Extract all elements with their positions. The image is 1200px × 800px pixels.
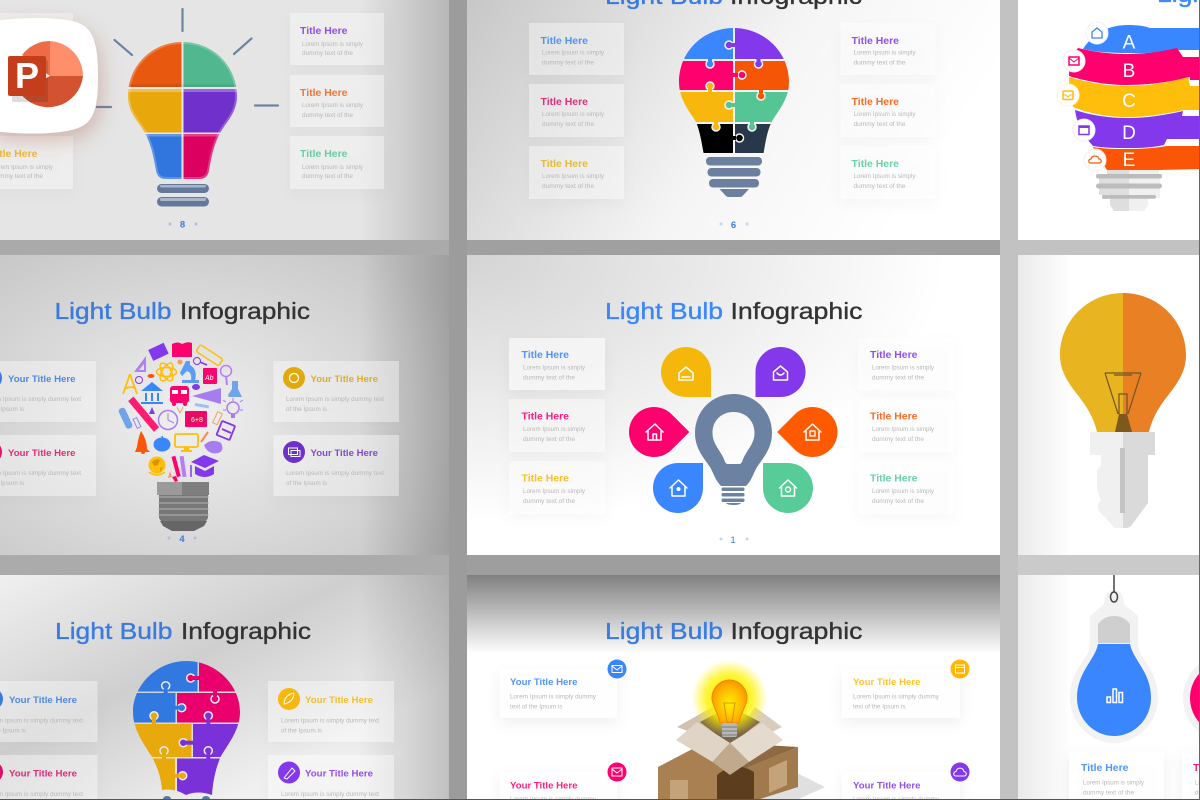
jigsaw bulb base	[706, 157, 762, 197]
card: green title: Lorem Ipsum is simply	[872, 488, 935, 495]
icon: yellow calendar	[950, 660, 970, 678]
title	[605, 298, 862, 324]
card: pink title fragment	[1182, 752, 1200, 800]
title: Infographic	[180, 298, 310, 324]
card: purple title	[290, 13, 384, 65]
second bulb fragment	[1183, 654, 1200, 742]
hanger	[1110, 575, 1118, 602]
slide 8: segmented bulb	[0, 0, 449, 240]
slide: orange and yellow key bulb	[1018, 255, 1200, 555]
icon: bar chart	[1107, 689, 1122, 702]
card: blue title	[529, 23, 624, 75]
slide: hanging bulbs	[1018, 575, 1200, 800]
card: purple title	[840, 23, 936, 75]
card: yellow title	[842, 669, 960, 718]
title: Infographic	[730, 618, 862, 644]
card: pink title: Lorem Ipsum is simply	[523, 426, 586, 433]
card: pink title	[0, 755, 98, 800]
card: purple title: Title Here	[852, 35, 899, 47]
card: green title: Title Here	[870, 472, 918, 484]
card: yellow title: dummy text of the	[542, 183, 594, 190]
icon cluster: 6+8	[191, 417, 203, 424]
card: orange title	[858, 399, 954, 452]
metal bulb socket	[157, 482, 209, 531]
card: purple title: Lorem Ipsum is simply	[872, 364, 935, 372]
card: orange title: Title Here	[870, 410, 918, 422]
bulb glow	[692, 660, 768, 736]
PowerPoint logo: P	[15, 55, 39, 96]
page number	[720, 220, 748, 231]
card: yellow title	[509, 461, 605, 514]
icon: pink mail	[608, 762, 626, 782]
card: orange title: Lorem Ipsum is simply	[302, 102, 364, 109]
title: Light Bulb	[55, 618, 172, 644]
icon: purple cloud	[950, 762, 970, 782]
card: green title: Lorem Ipsum is simply	[854, 173, 916, 180]
page number	[168, 534, 196, 545]
page number	[720, 535, 748, 546]
slide 5: bulb in open box	[467, 575, 1000, 800]
card: orange title: Title Here	[852, 96, 899, 108]
page number: 1	[730, 535, 736, 546]
card: purple title: dummy text of the	[854, 60, 906, 66]
card: blue title: Lorem Ipsum is simply dummy	[510, 694, 597, 700]
card: blue title: Lorem Ipsum is simply	[1083, 780, 1145, 786]
card: yellow title: text of the Ipsum is	[853, 704, 906, 710]
blue bulb	[1077, 644, 1151, 736]
card: purple title: Title Here	[870, 349, 918, 361]
title: Light Bulb	[605, 618, 723, 644]
card: blue title	[500, 669, 617, 718]
card: orange title	[840, 84, 936, 137]
card: green title: Title Here	[852, 158, 899, 170]
page number	[168, 220, 198, 230]
card: yellow title: of the Ipsum is	[286, 406, 327, 413]
card: purple title	[268, 755, 394, 800]
card: orange title: dummy text of the	[302, 112, 353, 119]
bulb base	[1096, 170, 1162, 211]
card: purple title	[858, 338, 954, 390]
card: orange title: dummy text of the	[854, 121, 906, 128]
card: purple title: Lorem Ipsum is simply dummy text	[286, 470, 384, 477]
card: orange title	[290, 75, 384, 127]
band D	[1075, 110, 1200, 148]
card: yellow title	[274, 361, 399, 422]
card: yellow title: of the Ipsum is	[281, 728, 322, 734]
band icons	[1057, 22, 1108, 171]
card: pink title	[0, 435, 96, 496]
title: Infographic	[730, 298, 862, 324]
card: yellow title: Lorem Ipsum is simply	[542, 173, 605, 180]
card: blue title: Your Title Here	[510, 677, 578, 688]
card: pink title	[529, 84, 624, 137]
card: purple title: dummy text of the	[302, 50, 353, 57]
card: pink title	[500, 772, 617, 800]
card: blue title: Title Here	[1081, 762, 1129, 774]
petal: orange	[777, 397, 848, 467]
card: purple title: Title Here	[300, 25, 348, 37]
title	[605, 0, 862, 9]
card: yellow title: Title Here	[522, 472, 569, 484]
band E	[1093, 146, 1200, 170]
slide 1: hero bulb with petals	[467, 255, 1000, 555]
bulb glass right half	[1123, 293, 1186, 432]
card: purple title: Your Title Here	[310, 448, 378, 459]
card: yellow title: Your Title Here	[853, 677, 920, 688]
band A	[1083, 25, 1200, 53]
band letters: D	[1122, 123, 1136, 144]
card: blue title: Lorem Ipsum is simply	[523, 364, 586, 372]
card: orange title: Title Here	[300, 87, 348, 99]
central bulb	[695, 394, 772, 505]
bulb glass left half	[1060, 293, 1123, 432]
jigsaw bulb glass	[679, 28, 789, 153]
card: green title: dummy text of the	[302, 173, 353, 180]
filament	[1105, 373, 1141, 432]
slide 6: jigsaw bulb	[467, 0, 1000, 240]
band C	[1069, 77, 1200, 117]
card: blue title: dummy text of the	[542, 60, 594, 66]
title	[54, 298, 310, 324]
card: yellow title	[529, 146, 624, 199]
petal: purple	[756, 347, 806, 397]
card: pink title: Title Here	[540, 96, 588, 108]
card: purple title: Your Title Here	[853, 780, 920, 792]
card: orange title: dummy text of the	[872, 436, 924, 443]
icon: blue mail	[608, 660, 626, 678]
card: green title: dummy text of the	[854, 183, 906, 190]
card: blue title: Your Title Here	[9, 695, 77, 706]
card: purple title	[842, 772, 960, 800]
card: green title	[858, 461, 954, 514]
card: yellow title: Lorem Ipsum is simply dummy text	[281, 718, 379, 724]
petal: green	[763, 463, 813, 513]
card: blue title	[0, 681, 98, 742]
card: purple title: Your Title Here	[305, 768, 373, 780]
title	[605, 618, 862, 644]
card: yellow title: Title Here	[540, 158, 588, 170]
card: green title: Title Here	[300, 148, 348, 160]
card: purple title	[274, 435, 399, 496]
card: purple title: of the Ipsum is	[286, 480, 327, 487]
title: Infographic	[181, 618, 311, 644]
open front flaps	[676, 722, 783, 775]
jigsaw bulb base fragments	[163, 796, 210, 800]
key-shaped base	[1090, 432, 1155, 528]
card: purple title: dummy text of the	[872, 374, 924, 382]
card: blue title: dummy text of the	[1083, 790, 1134, 796]
band letters: E	[1123, 150, 1135, 171]
petal: yellow	[661, 347, 711, 397]
card: yellow title: Lorem Ipsum is simply dummy text	[286, 396, 384, 403]
card: pink title: Your Title Here	[9, 768, 77, 780]
card: pink title: Lorem Ipsum is simply	[542, 111, 605, 118]
band letters: B	[1123, 61, 1135, 82]
page number: 6	[731, 220, 736, 231]
PowerPoint app badge	[0, 18, 98, 134]
band letters: C	[1122, 91, 1136, 112]
card: blue title: Title Here	[522, 349, 569, 361]
card: green title: dummy text of the	[872, 498, 924, 505]
page number: 4	[179, 534, 185, 545]
card: yellow title: Lorem Ipsum is simply dummy	[853, 694, 940, 700]
jigsaw bulb glass	[133, 661, 240, 795]
bulb: six colour segments	[128, 42, 237, 179]
card: green title: Lorem Ipsum is simply	[302, 164, 364, 171]
icon cluster	[118, 342, 243, 482]
card: blue title	[509, 338, 605, 390]
title: Light Bulb	[605, 298, 723, 324]
card: hidden left top	[0, 13, 73, 65]
slide 4: education icons bulb	[0, 255, 449, 555]
card: green title	[290, 136, 384, 189]
card: purple title: Lorem Ipsum is simply	[854, 50, 916, 56]
bulb cap	[1098, 616, 1130, 643]
card: yellow title: dummy text of the	[523, 498, 575, 505]
card: blue title: Your Title Here	[8, 374, 76, 385]
card: yellow title: Your Title Here	[310, 374, 378, 385]
card: pink title: dummy text of the	[523, 436, 575, 443]
page number: 8	[180, 220, 185, 230]
card: pink title: dummy text of the	[542, 121, 594, 128]
card: orange title: Lorem Ipsum is simply	[872, 426, 935, 433]
band letters: A	[1123, 32, 1136, 54]
glowing bulb	[712, 680, 747, 737]
card: blue title	[0, 361, 96, 422]
card: pink title	[509, 399, 605, 452]
bulb base bars	[157, 184, 209, 206]
slide 3: jigsaw bulb with two-column cards	[0, 575, 449, 800]
petal: pink	[619, 397, 689, 467]
card: pink title: Your Title Here	[8, 448, 76, 459]
bulb halo	[1070, 590, 1158, 743]
icon cluster: Ab	[204, 375, 214, 382]
card: yellow title	[268, 681, 394, 742]
card: pink title: Your Title Here	[510, 780, 578, 792]
title: Light Bulb	[54, 298, 172, 324]
card: blue title: dummy text of the	[523, 374, 575, 382]
card: green title	[840, 146, 936, 199]
cardboard box	[658, 706, 825, 800]
card: blue title: text of the Ipsum is	[510, 704, 562, 710]
card: yellow title: Your Title Here	[305, 695, 373, 706]
petal: blue	[653, 463, 703, 513]
card: blue title: Title Here	[540, 35, 588, 47]
slide: A to E banded bulb	[1018, 0, 1200, 240]
card: pink title: Title Here	[522, 410, 569, 422]
card: purple title: Lorem Ipsum is simply dummy text	[281, 791, 379, 798]
band letters	[1122, 32, 1136, 171]
card: orange title: Lorem Ipsum is simply	[854, 111, 916, 118]
title	[55, 618, 311, 644]
band B	[1069, 48, 1200, 85]
light rays	[97, 9, 278, 107]
card: blue title: Lorem Ipsum is simply	[542, 50, 605, 56]
card: blue title	[1069, 752, 1164, 800]
card: purple title: Lorem Ipsum is simply	[302, 41, 364, 48]
card: yellow title: Lorem Ipsum is simply	[523, 488, 586, 495]
card: yellow title	[0, 136, 73, 189]
